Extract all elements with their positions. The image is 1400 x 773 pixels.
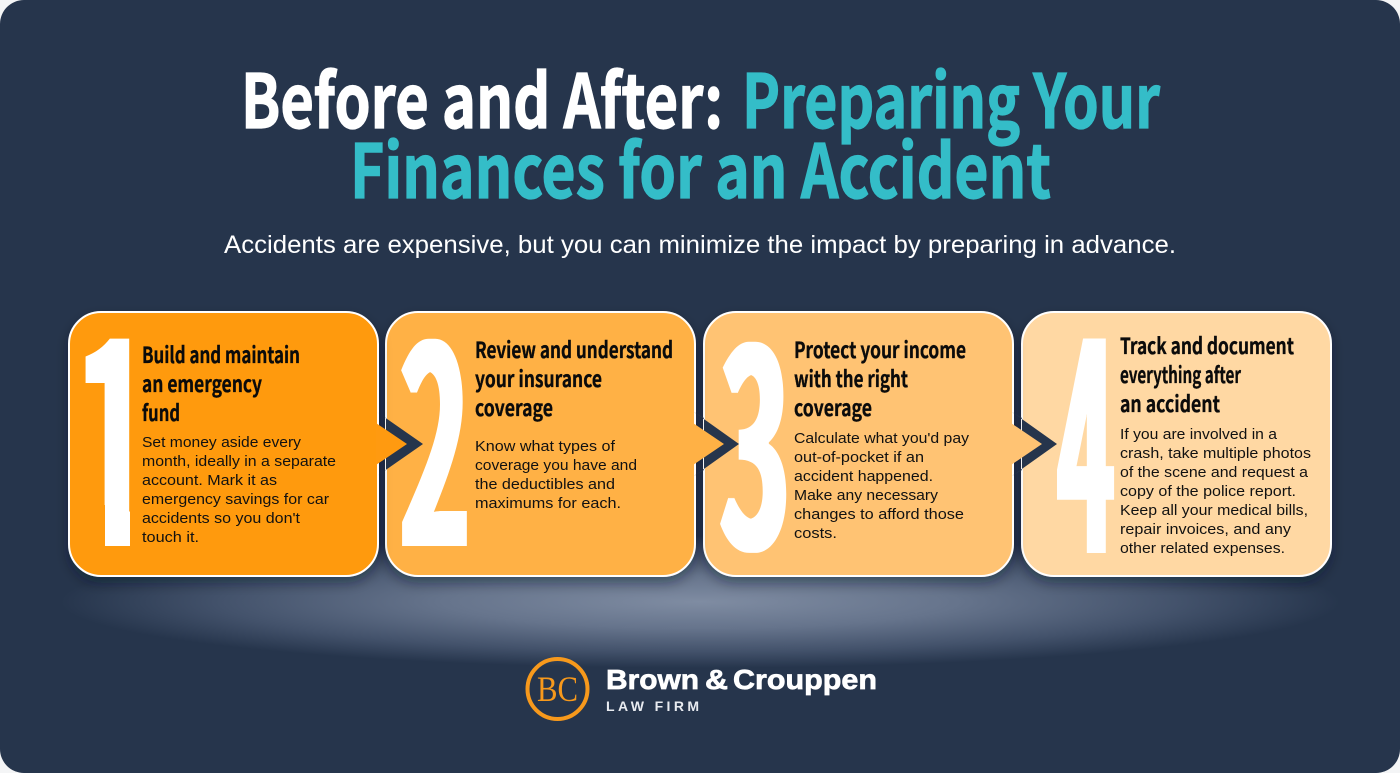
card 2 body: maximums for each. [475, 495, 621, 512]
card 4 body: of the scene and request a [1120, 464, 1309, 481]
title: Before and After: [241, 43, 723, 150]
card 2 heading: your insurance [475, 362, 602, 394]
card 1 body: account. Mark it as [142, 472, 277, 489]
card 2 body [475, 438, 637, 512]
card 3 heading: coverage [794, 391, 872, 423]
card 1 body [142, 434, 336, 546]
arrow: card 2 to card 3 [693, 412, 739, 476]
card 1 body: Set money aside every [142, 434, 302, 451]
card 4 body [1120, 426, 1311, 557]
card 2: review and understand [386, 220, 739, 628]
logo badge: BC [537, 669, 578, 709]
logo wordmark: Crouppen [733, 664, 877, 695]
card 4 body: Keep all your medical bills, [1120, 502, 1308, 519]
logo wordmark [606, 664, 877, 695]
logo tagline: LAW FIRM [606, 698, 699, 714]
logo wordmark: Brown [606, 664, 699, 695]
logo badge [528, 659, 588, 719]
card 4 body: other related expenses. [1120, 540, 1285, 557]
card 1 body: emergency savings for car [142, 491, 329, 508]
card 3 body: costs. [794, 525, 837, 542]
card 3 body: out-of-pocket if an [794, 449, 924, 466]
card 1 heading: fund [142, 396, 180, 428]
logo [528, 659, 877, 719]
card 4 body: repair invoices, and any [1120, 521, 1292, 538]
glow under cards [60, 536, 1340, 668]
card 2 body: the deductibles and [475, 476, 615, 493]
number 2: 2 [400, 220, 470, 628]
arrow: card 1 to card 2 [376, 412, 423, 476]
title: Finances for an Accident [350, 113, 1051, 220]
number 4: 4 [1058, 208, 1114, 639]
card 1 heading: Build and maintain [142, 338, 300, 370]
card 3 body: changes to afford those [794, 506, 964, 523]
number 1: 1 [72, 213, 156, 630]
card 4 body: crash, take multiple photos [1120, 445, 1311, 462]
card 2 body: coverage you have and [475, 457, 637, 474]
card 3 body: accident happened. [794, 468, 933, 485]
card 1 body: touch it. [142, 529, 199, 546]
card 1 body: month, ideally in a separate [142, 453, 336, 470]
card 3 heading [794, 333, 966, 423]
title: Preparing Your [742, 43, 1161, 150]
card 1 body: accidents so you don't [142, 510, 301, 527]
card 4 body: If you are involved in a [1120, 426, 1278, 443]
card 1 heading: an emergency [142, 367, 262, 399]
card 3 heading: with the right [794, 362, 908, 394]
card 4 heading: an accident [1120, 387, 1220, 419]
card 3 body: Calculate what you'd pay [794, 430, 970, 447]
card 3 heading: Protect your income [794, 333, 966, 365]
card 3 body [794, 430, 970, 542]
card 2 heading [475, 333, 673, 423]
card 4 heading: everything after [1120, 358, 1241, 390]
card 1: build and maintain [66, 311, 423, 588]
arrow: card 3 to card 4 [1011, 412, 1057, 476]
subtitle: Accidents are expensive, but you can minimize the impact by preparing in advance. [224, 231, 1176, 259]
number 3: 3 [720, 223, 790, 631]
card 3 body: Make any necessary [794, 487, 939, 504]
card 4 heading: Track and document [1120, 329, 1294, 361]
card 4: track and document [1022, 208, 1331, 639]
card 2 heading: Review and understand [475, 333, 673, 365]
title [241, 43, 1161, 220]
logo wordmark: & [705, 664, 728, 695]
card 3: protect your income [704, 223, 1057, 631]
card 1 heading [142, 338, 300, 428]
card 4 heading [1120, 329, 1294, 419]
card 4 body: copy of the police report. [1120, 483, 1296, 500]
card 2 body: Know what types of [475, 438, 616, 455]
card 2 heading: coverage [475, 391, 553, 423]
